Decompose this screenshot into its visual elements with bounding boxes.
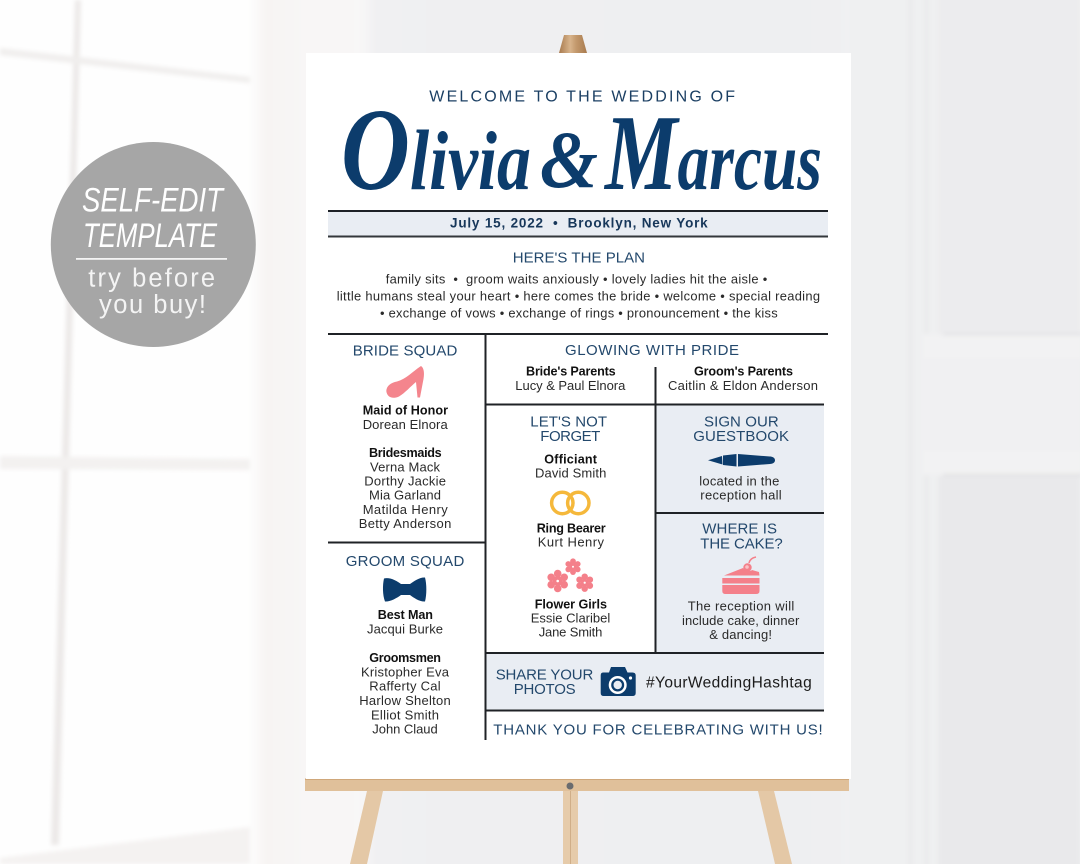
easel xyxy=(305,35,849,864)
title: couple names: Olivia xyxy=(341,84,531,215)
panel: share your photos xyxy=(496,666,812,698)
panel: glowing with pride xyxy=(515,342,818,393)
date and location band: July 15, 2022 • Brooklyn, New York xyxy=(450,215,708,230)
groom's parents: Groom's Parents xyxy=(694,365,793,379)
bride's parents xyxy=(515,365,626,393)
heading: share your photos xyxy=(496,666,593,698)
badge title xyxy=(82,182,225,255)
officiant xyxy=(535,452,606,481)
flower girls xyxy=(531,597,610,640)
bride's parents: Lucy & Paul Elnora xyxy=(515,378,626,393)
plan text: • exchange of vows • exchange of rings • pronouncement • the kiss xyxy=(380,305,778,320)
groom squad names xyxy=(359,608,451,737)
date and location band xyxy=(328,210,828,238)
cake text: & dancing! xyxy=(709,627,772,642)
icon: fountain pen xyxy=(708,454,775,466)
groom squad names: Groomsmen xyxy=(369,651,441,665)
panel: let's not forget xyxy=(530,414,610,640)
plan text xyxy=(337,271,820,320)
panel: where is the cake xyxy=(682,521,800,642)
flower girls: Flower Girls xyxy=(535,597,607,611)
heading: welcome: WELCOME TO THE WEDDING OF xyxy=(429,89,735,106)
groom squad names: Harlow Shelton xyxy=(359,693,451,708)
badge subtitle xyxy=(88,265,215,319)
groom squad names: Jacqui Burke xyxy=(367,622,443,637)
ring bearer: Ring Bearer xyxy=(537,521,606,535)
bride squad names: Mia Garland xyxy=(369,488,441,503)
ring bearer xyxy=(537,521,606,550)
groom squad names: Elliot Smith xyxy=(371,707,439,722)
heading: the plan: HERE'S THE PLAN xyxy=(513,250,645,267)
icon: bow tie xyxy=(383,577,426,602)
badge subtitle: you buy! xyxy=(99,291,206,319)
heading: let's not forget: LET'S NOT xyxy=(530,414,607,431)
heading: let's not forget: FORGET xyxy=(540,428,600,445)
heading: where is the cake: THE CAKE? xyxy=(700,535,783,552)
cake text xyxy=(682,599,800,642)
title: couple names xyxy=(341,84,822,215)
heading: bride squad: BRIDE SQUAD xyxy=(353,343,457,360)
bride squad names: Dorean Elnora xyxy=(363,417,448,432)
bride squad names: Dorthy Jackie xyxy=(364,474,446,488)
plan text: little humans steal your heart • here comes the bride • welcome • special reading xyxy=(337,288,820,303)
tinted cell backgrounds xyxy=(486,405,824,710)
panel: groom squad xyxy=(346,553,464,737)
heading: share your photos: SHARE YOUR xyxy=(496,666,593,683)
badge subtitle: try before xyxy=(88,265,215,293)
bride squad names: Betty Anderson xyxy=(359,516,451,531)
flower girls: Jane Smith xyxy=(539,625,602,640)
panel: guestbook xyxy=(693,414,789,503)
guestbook text xyxy=(699,474,782,503)
heading: where is the cake: WHERE IS xyxy=(702,521,777,538)
groom squad names: John Claud xyxy=(372,722,438,737)
bride squad names: Matilda Henry xyxy=(363,502,448,517)
badge title: TEMPLATE xyxy=(83,217,217,255)
heading: groom squad: GROOM SQUAD xyxy=(346,553,464,570)
groom's parents xyxy=(668,365,818,393)
heading: glowing with pride: GLOWING WITH PRIDE xyxy=(565,342,739,359)
ring bearer: Kurt Henry xyxy=(538,535,604,550)
heading: sign our guestbook: SIGN OUR xyxy=(704,414,779,431)
cake text: The reception will xyxy=(688,599,794,614)
bride squad names: Verna Mack xyxy=(370,459,440,474)
title: couple names: Marcus xyxy=(603,94,822,213)
thank you message: THANK YOU FOR CELEBRATING WITH US! xyxy=(493,721,823,738)
heading: sign our guestbook xyxy=(693,414,789,445)
badge: self-edit template xyxy=(51,142,256,347)
groom squad names: Best Man xyxy=(378,608,433,622)
icon: high heel xyxy=(386,366,424,398)
icon: flowers xyxy=(547,558,593,592)
plan text: family sits • groom waits anxiously • lovely ladies hit the aisle • xyxy=(386,271,767,286)
groom's parents: Caitlin & Eldon Anderson xyxy=(668,378,818,393)
cake text: include cake, dinner xyxy=(682,613,800,628)
hashtag: #YourWeddingHashtag xyxy=(646,674,812,691)
groom squad names: Kristopher Eva xyxy=(361,664,450,679)
guestbook text: reception hall xyxy=(700,488,782,503)
heading: where is the cake xyxy=(700,521,783,552)
panel: the plan xyxy=(337,250,820,320)
badge title: SELF-EDIT xyxy=(82,182,225,220)
bride squad names xyxy=(359,404,451,531)
guestbook text: located in the xyxy=(699,474,779,489)
icon: cake slice xyxy=(722,557,760,594)
title: couple names: & xyxy=(540,114,598,205)
bride's parents: Bride's Parents xyxy=(526,365,616,379)
officiant: Officiant xyxy=(544,452,598,466)
icon: camera xyxy=(601,667,636,696)
poster board xyxy=(306,53,851,779)
heading: share your photos: PHOTOS xyxy=(514,681,576,698)
bride squad names: Maid of Honor xyxy=(363,404,448,418)
heading: sign our guestbook: GUESTBOOK xyxy=(693,428,789,445)
icon: wedding rings xyxy=(552,492,589,514)
panel: bride squad xyxy=(353,343,457,531)
flower girls: Essie Claribel xyxy=(531,611,610,626)
heading: let's not forget xyxy=(530,414,607,445)
bride squad names: Bridesmaids xyxy=(369,446,442,460)
groom squad names: Rafferty Cal xyxy=(369,679,441,694)
officiant: David Smith xyxy=(535,466,606,481)
